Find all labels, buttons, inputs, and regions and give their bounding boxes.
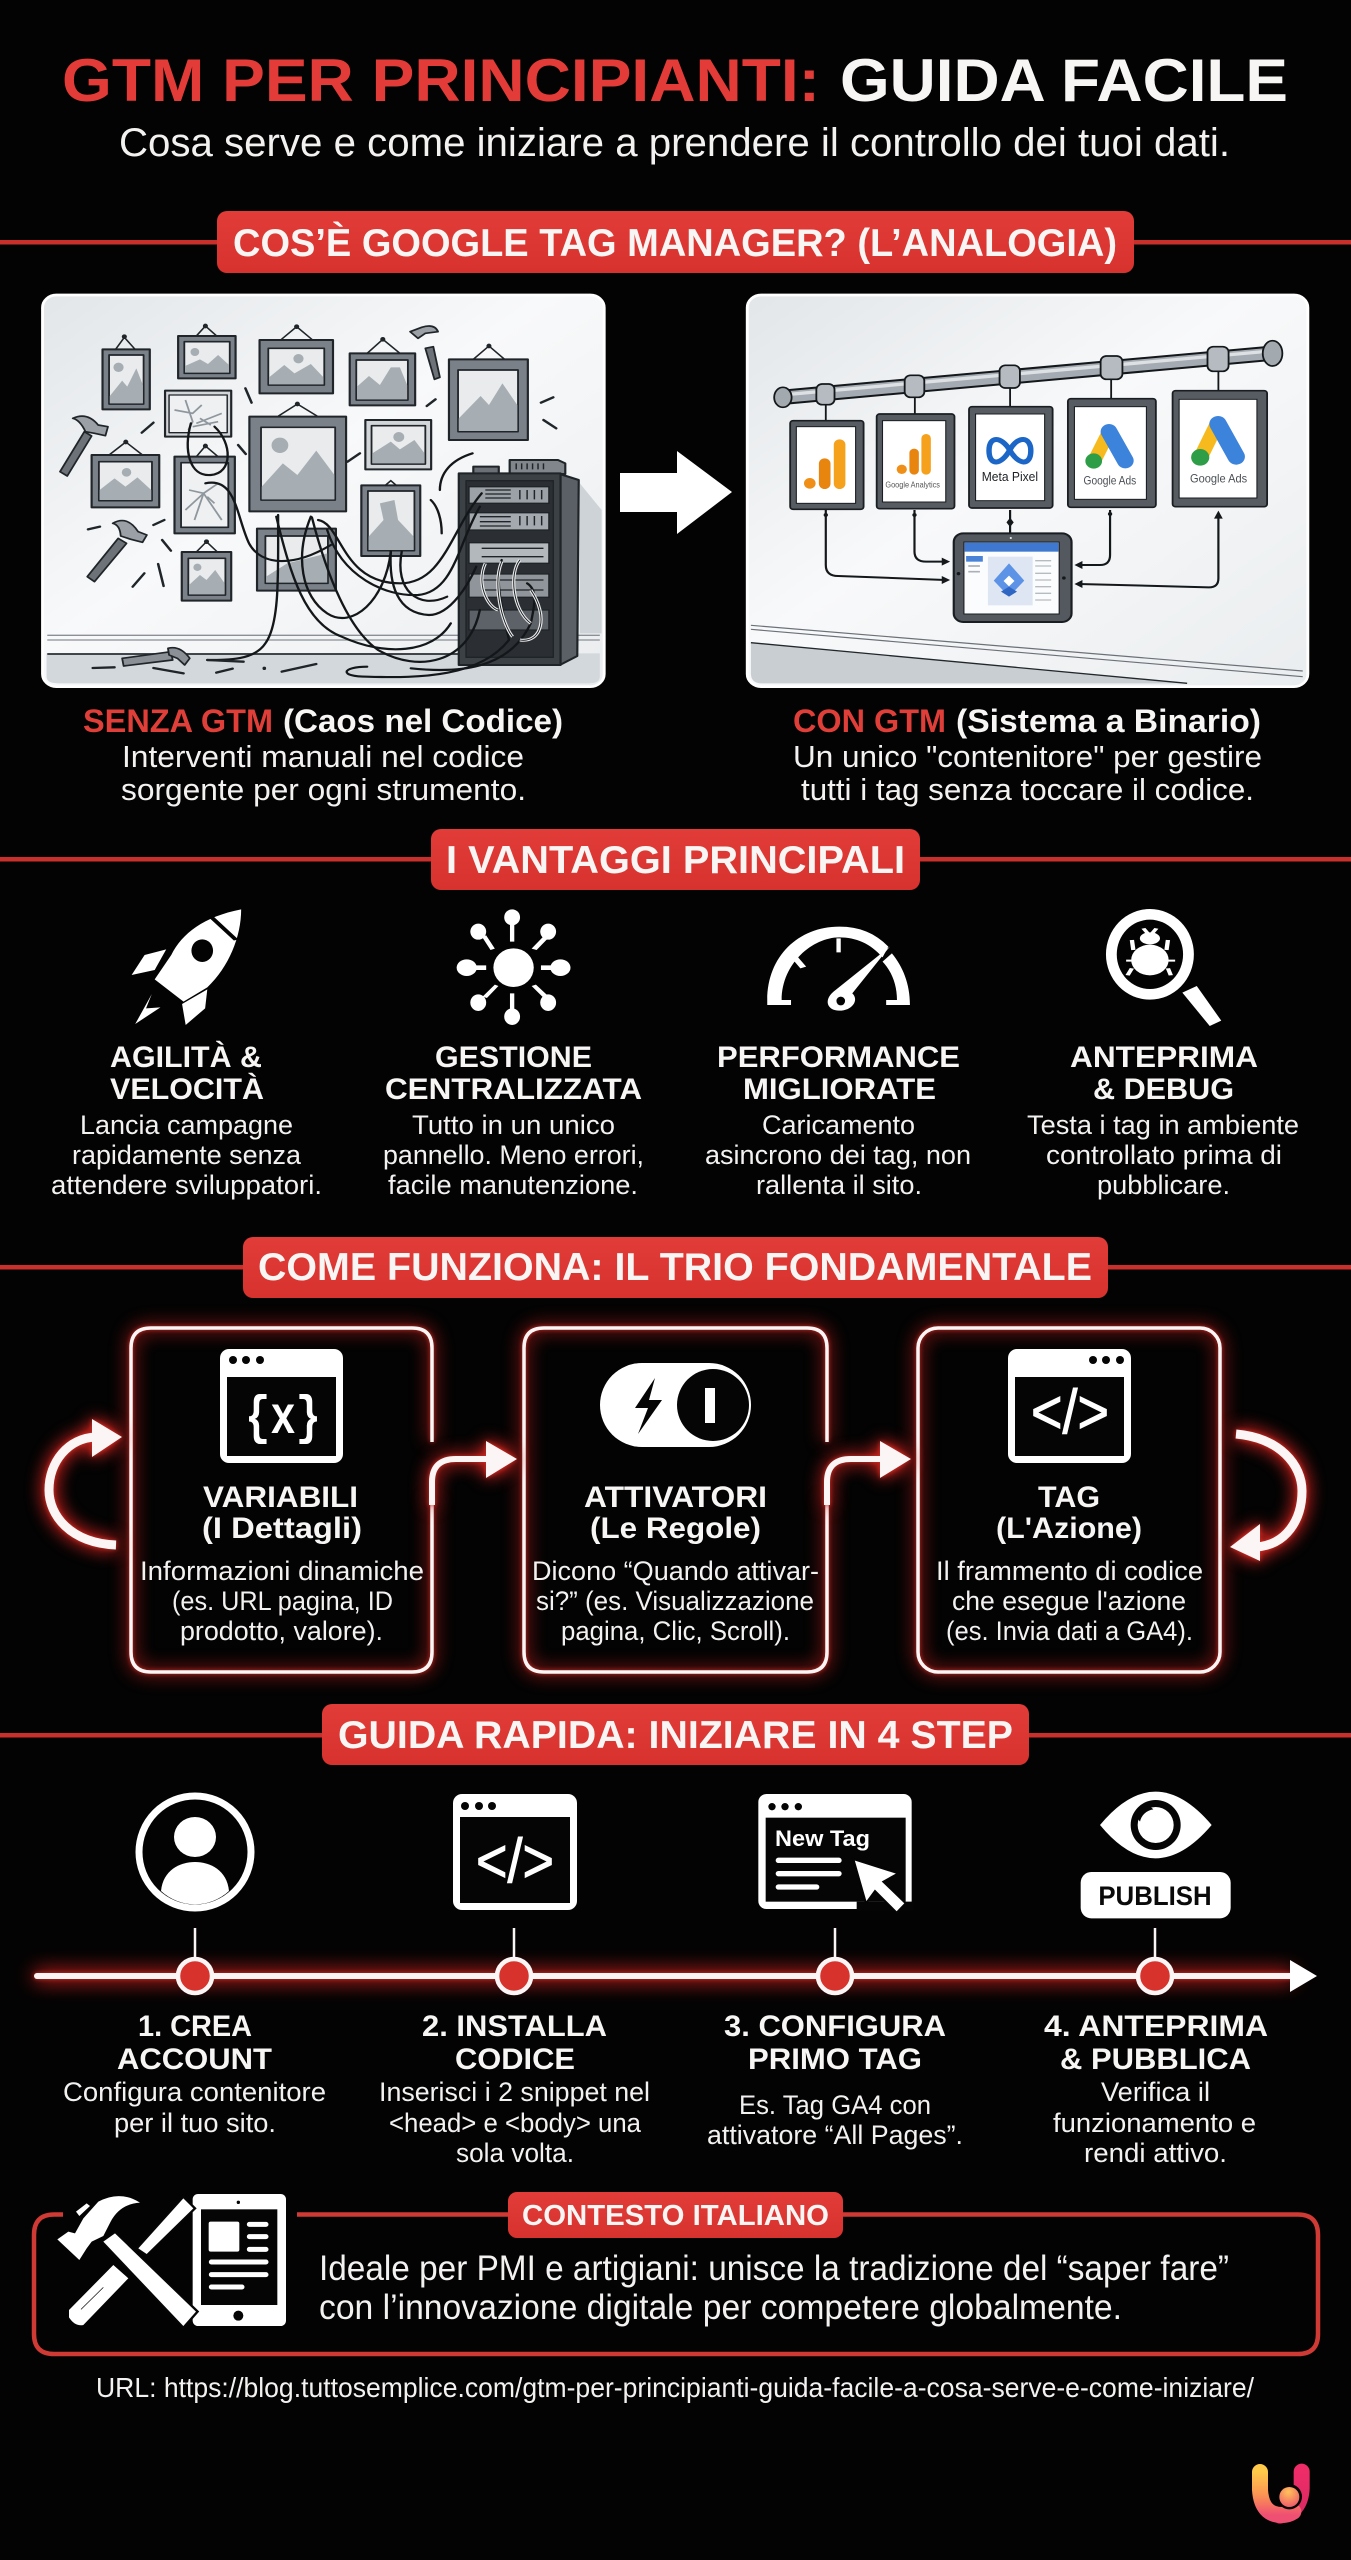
caption: con GTM: tutti i tag senza toccare il codice. <box>801 772 1254 807</box>
icons: new tag window and publish <box>758 1792 1231 1918</box>
card: attivatori: ATTIVATORI <box>584 1481 767 1514</box>
card: variabili: Informazioni dinamiche <box>140 1556 424 1586</box>
benefit: gestione: CENTRALIZZATA <box>385 1073 642 1106</box>
card: tag: (L'Azione) <box>996 1512 1142 1545</box>
panel: con GTM illustration <box>747 295 1308 687</box>
step 2: 2. INSTALLA <box>422 2010 607 2043</box>
section heading: analogia: COS’È GOOGLE TAG MANAGER? (L’ANALOGIA) <box>233 221 1117 265</box>
benefit: gestione: pannello. Meno errori, <box>383 1140 644 1170</box>
step 2 <box>379 2010 650 2168</box>
icon: new tag window: New Tag <box>775 1826 870 1851</box>
panel: con GTM illustration: Google Ads <box>1084 474 1136 487</box>
wall shadow of rack <box>580 483 602 633</box>
nails <box>88 388 556 673</box>
section heading: trio: COME FUNZIONA: IL TRIO FONDAMENTALE <box>258 1246 1092 1289</box>
section heading: trio <box>0 1237 1351 1298</box>
google ads logos <box>1094 432 1109 461</box>
cracks <box>175 400 222 520</box>
step 4: 4. ANTEPRIMA <box>1044 2010 1268 2043</box>
card: variabili: (I Dettagli) <box>202 1512 362 1545</box>
benefit: anteprima: pubblicare. <box>1097 1170 1230 1200</box>
step 2: <head> e <body> una <box>389 2108 642 2138</box>
arrow: loop right <box>1230 1434 1302 1561</box>
panel: con GTM illustration: Meta Pixel <box>982 470 1038 484</box>
panel: contesto italiano <box>34 2192 1318 2354</box>
section heading: guida rapida <box>0 1704 1351 1765</box>
card: variabili: VARIABILI <box>203 1481 358 1514</box>
step 1: per il tuo sito. <box>114 2108 276 2138</box>
step 3: 3. CONFIGURA <box>724 2010 946 2043</box>
logo <box>1260 2472 1302 2516</box>
step 4: funzionamento e <box>1053 2108 1256 2138</box>
benefit: agilità: rapidamente senza <box>72 1140 302 1170</box>
step 1: ACCOUNT <box>117 2043 272 2076</box>
panel: con GTM illustration: Google Analytics <box>885 480 940 489</box>
icon: publish button: PUBLISH <box>1098 1881 1212 1911</box>
hammers <box>60 326 440 666</box>
step 3: PRIMO TAG <box>748 2043 922 2076</box>
card: variabili <box>131 1328 432 1672</box>
caption: con GTM <box>793 703 1262 807</box>
step 2: sola volta. <box>456 2138 574 2168</box>
benefit: agilità: attendere sviluppatori. <box>51 1170 322 1200</box>
benefit: anteprima: & DEBUG <box>1093 1073 1234 1106</box>
section heading: vantaggi: I VANTAGGI PRINCIPALI <box>446 839 905 882</box>
card: tag <box>918 1328 1220 1672</box>
step 3 <box>707 2010 963 2150</box>
card: tag: che esegue l'azione <box>952 1586 1186 1616</box>
benefit: agilità: Lancia campagne <box>80 1110 293 1140</box>
analytics logos <box>804 478 816 489</box>
card: variabili: (es. URL pagina, ID <box>172 1586 393 1616</box>
panel: con GTM illustration: Google Ads <box>1190 471 1247 485</box>
card: tag: Il frammento di codice <box>936 1556 1203 1586</box>
icon: rocket <box>132 909 241 1025</box>
icon: variable window <box>220 1349 343 1463</box>
caption: senza GTM: (Caos nel Codice) <box>283 703 563 739</box>
card: variabili: prodotto, valore). <box>180 1616 383 1646</box>
label: contesto italiano: CONTESTO ITALIANO <box>522 2200 829 2232</box>
card: attivatori: Dicono “Quando attivar- <box>532 1556 819 1586</box>
frames <box>790 391 1267 509</box>
timeline <box>34 1928 1317 1993</box>
benefit: anteprima: Testa i tag in ambiente <box>1027 1110 1299 1140</box>
step 4: & PUBBLICA <box>1060 2043 1251 2076</box>
title: GTM PER PRINCIPIANTI: <box>62 47 820 114</box>
icons: benefits row <box>132 909 1221 1026</box>
caption: senza GTM <box>83 703 563 807</box>
section heading: analogia <box>0 211 1351 273</box>
benefit: gestione: facile manutenzione. <box>388 1170 638 1200</box>
card: attivatori: pagina, Clic, Scroll). <box>561 1616 790 1646</box>
caption: senza GTM: Interventi manuali nel codice <box>122 739 524 774</box>
benefit: anteprima <box>1027 1041 1299 1200</box>
benefit: agilità: AGILITÀ & <box>110 1040 262 1074</box>
subtitle: Cosa serve e come iniziare a prendere il controllo dei tuoi dati. <box>119 121 1230 165</box>
step 3: attivatore “All Pages”. <box>707 2120 963 2150</box>
label: contesto italiano <box>508 2192 843 2238</box>
card: tag: TAG <box>1038 1481 1100 1514</box>
benefit: performance: PERFORMANCE <box>717 1041 960 1074</box>
panel: contesto italiano: con l’innovazione digitale per competere globalmente. <box>319 2288 1122 2327</box>
card: attivatori: si?” (es. Visualizzazione <box>536 1586 814 1616</box>
icon: variable window: {x} <box>245 1389 321 1450</box>
benefit: performance: rallenta il sito. <box>756 1170 922 1200</box>
step 4 <box>1044 2010 1268 2168</box>
title <box>62 47 1288 114</box>
benefit: gestione: Tutto in un unico <box>412 1110 615 1140</box>
icon: install code window: </> <box>476 1827 554 1896</box>
caption: con GTM: CON GTM <box>793 703 946 739</box>
benefit: gestione <box>383 1041 644 1200</box>
icon: hub <box>457 909 571 1025</box>
tablet <box>954 533 1072 622</box>
icon: eye <box>1100 1792 1212 1858</box>
panel: senza GTM illustration <box>43 295 604 687</box>
benefit: agilità: VELOCITÀ <box>110 1072 264 1106</box>
icon: gauge <box>767 927 910 1011</box>
section heading: vantaggi <box>0 829 1351 890</box>
caption: senza GTM: SENZA GTM <box>83 703 273 739</box>
connectors <box>826 510 1218 587</box>
caption: senza GTM: sorgente per ogni strumento. <box>121 772 526 807</box>
card: attivatori: (Le Regole) <box>590 1512 761 1545</box>
meta logo <box>989 439 1031 462</box>
icon: magnifier with bug <box>1106 909 1221 1026</box>
wires <box>188 423 534 677</box>
caption: con GTM: Un unico "contenitore" per gestire <box>793 739 1262 774</box>
panel: contesto italiano: Ideale per PMI e artigiani: unisce la tradizione del “saper fare” <box>319 2249 1229 2288</box>
icon: account <box>139 1796 251 1908</box>
arrow: from chaos to system <box>620 451 732 534</box>
step 4: rendi attivo. <box>1084 2138 1227 2168</box>
card: tag: (es. Invia dati a GA4). <box>946 1616 1193 1646</box>
title: GUIDA FACILE <box>840 47 1288 114</box>
icon: tools and tablet <box>57 2194 286 2326</box>
step 2: Inserisci i 2 snippet nel <box>379 2077 650 2107</box>
arrow: variabili to attivatori <box>432 1441 517 1505</box>
icon: code window <box>1008 1349 1131 1463</box>
benefit: gestione: GESTIONE <box>435 1041 592 1074</box>
benefit: anteprima: ANTEPRIMA <box>1070 1041 1258 1074</box>
benefit: agilità <box>51 1040 322 1200</box>
rail <box>774 341 1282 421</box>
icon: code window: </> <box>1031 1378 1109 1447</box>
step 1: Configura contenitore <box>63 2077 326 2107</box>
step 1 <box>63 2010 326 2138</box>
rack <box>459 460 579 665</box>
step 3: Es. Tag GA4 con <box>739 2090 931 2120</box>
arrow: attivatori to tag <box>827 1441 911 1505</box>
step 4: Verifica il <box>1101 2077 1210 2107</box>
benefit: performance: asincrono dei tag, non <box>705 1140 971 1170</box>
icon: publish button <box>1081 1872 1231 1918</box>
icon: install code window <box>453 1794 577 1910</box>
icon: toggle with bolt <box>600 1363 751 1447</box>
section heading: guida rapida: GUIDA RAPIDA: INIZIARE IN 4 STEP <box>338 1714 1013 1757</box>
source url: URL: https://blog.tuttosemplice.com/gtm-per-principianti-guida-facile-a-cosa-serve-e-come-iniziare/ <box>96 2372 1254 2403</box>
benefit: anteprima: controllato prima di <box>1046 1140 1282 1170</box>
card: attivatori <box>524 1328 827 1672</box>
step 1: 1. CREA <box>138 2010 252 2043</box>
benefit: performance: Caricamento <box>762 1110 915 1140</box>
arrow: loop left <box>49 1419 122 1545</box>
benefit: performance <box>705 1041 971 1200</box>
benefit: performance: MIGLIORATE <box>743 1073 936 1106</box>
icon: new tag window <box>758 1794 913 1913</box>
caption: con GTM: (Sistema a Binario) <box>956 703 1261 739</box>
step 2: CODICE <box>455 2043 575 2076</box>
